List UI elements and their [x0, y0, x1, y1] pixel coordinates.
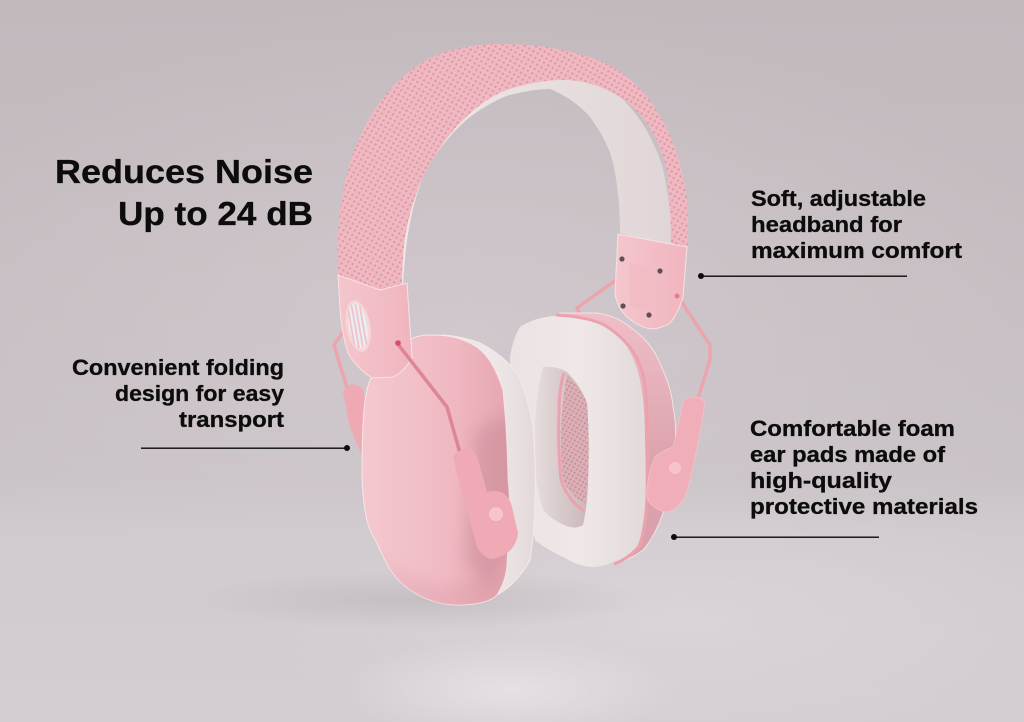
heading: Reduces Noise [55, 153, 313, 190]
callout: headband: maximum comfort [751, 238, 963, 263]
callout: folding: transport [179, 407, 285, 432]
left lever [453, 448, 518, 559]
headband white lining [401, 78, 672, 287]
right ear pad [510, 316, 646, 567]
right cup stripe [556, 315, 648, 564]
headband outer mesh [338, 44, 688, 290]
headphones product image [334, 44, 710, 610]
left pivot [395, 340, 401, 346]
callout: headband [698, 186, 963, 279]
left lever button [489, 507, 503, 521]
heading: Up to 24 dB [118, 195, 313, 232]
ear pad cavity [535, 367, 589, 528]
right lever [647, 397, 705, 512]
logo badge [342, 298, 375, 354]
left hinge block [338, 275, 412, 378]
callout: folding: Convenient folding [72, 355, 284, 380]
callout: ear pads [671, 416, 978, 540]
heading [55, 153, 313, 232]
left small lever [343, 384, 367, 457]
cavity mesh [561, 375, 589, 505]
callout: ear pads: protective materials [750, 494, 978, 519]
callout: headband: headband for [751, 212, 902, 237]
left ear cup [362, 335, 520, 610]
right lever button [669, 462, 681, 474]
left arm wire [397, 343, 460, 453]
right ear cup body [560, 313, 676, 562]
callout: headband: Soft, adjustable [751, 186, 926, 211]
callout: ear pads: high-quality [750, 468, 893, 493]
right pivot [674, 294, 680, 298]
hinge screws [619, 256, 663, 318]
callout: ear pads: ear pads made of [750, 442, 946, 467]
right hinge block [615, 234, 687, 329]
callout: folding [72, 355, 350, 451]
right arm wires [577, 280, 710, 398]
callout: folding: design for easy [115, 381, 285, 406]
left small wire [334, 329, 347, 388]
callout: ear pads: Comfortable foam [750, 416, 955, 441]
cavity pink rim [559, 373, 584, 511]
left ear pad [443, 335, 535, 595]
